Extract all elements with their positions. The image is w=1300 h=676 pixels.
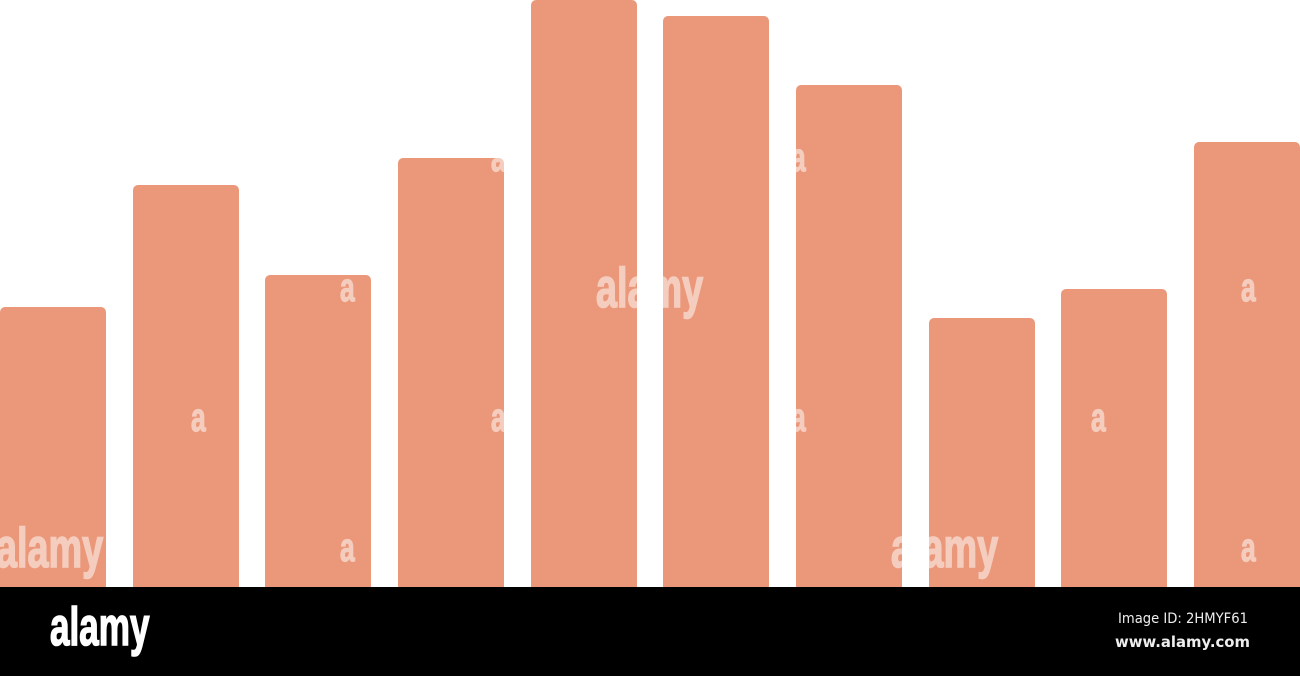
bar 3 bbox=[265, 275, 371, 587]
bar 10 bbox=[1194, 142, 1300, 587]
watermark: stock logos over bars: a bbox=[1241, 266, 1257, 310]
footer band bbox=[0, 587, 1300, 676]
watermark: stock logos over bars: a bbox=[791, 136, 807, 180]
bar 5 bbox=[531, 0, 637, 587]
watermark: stock logos over bars: a bbox=[340, 526, 356, 570]
watermark: stock logos over bars: a bbox=[191, 396, 207, 440]
watermark: stock logos over bars: a bbox=[491, 396, 507, 440]
bar 2 bbox=[133, 185, 239, 587]
bar 1 bbox=[0, 307, 106, 587]
image id: Image ID: 2HMYF61 bbox=[1118, 611, 1248, 627]
bar 7 bbox=[796, 85, 902, 587]
watermark: stock logos over bars: a bbox=[491, 136, 507, 180]
footer logo: alamy bbox=[50, 596, 150, 657]
bar 4 bbox=[398, 158, 504, 587]
watermark: stock logos over bars: a bbox=[791, 396, 807, 440]
bar 9 bbox=[1061, 289, 1167, 587]
bar 8 bbox=[929, 318, 1035, 587]
site url: www.alamy.com bbox=[1115, 633, 1250, 651]
watermark: stock logos over bars: alamy bbox=[596, 258, 704, 320]
watermark: stock logos over bars: a bbox=[340, 266, 356, 310]
watermark: stock logos over bars: a bbox=[1091, 396, 1107, 440]
watermark: stock logos over bars: alamy bbox=[891, 518, 999, 580]
watermark: stock logos over bars: a bbox=[1241, 526, 1257, 570]
bar 6 bbox=[663, 16, 769, 587]
